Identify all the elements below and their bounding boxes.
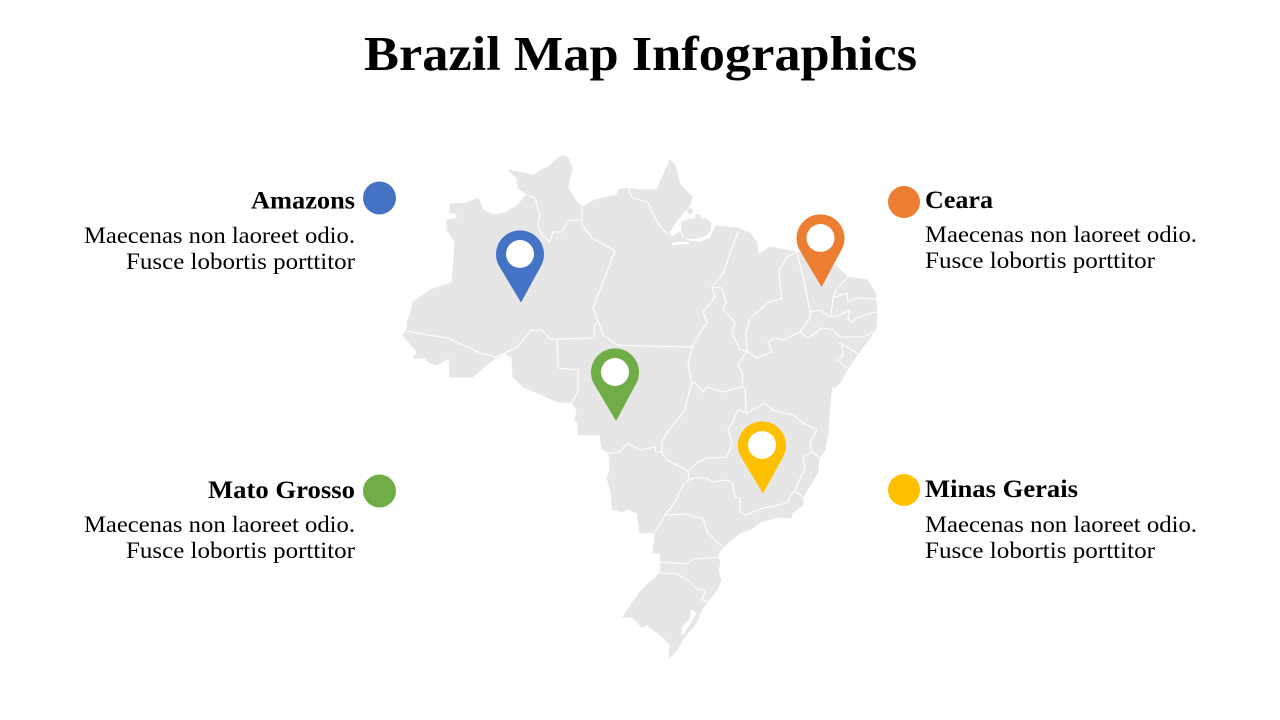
pin: Minas Gerais (yellow) [738,421,786,494]
map: Lagoa dos Patos [681,609,697,636]
text: Amazons description [84,223,355,274]
pin: Mato Grosso (green) [591,348,639,421]
icon: orange dot [888,186,920,218]
text: Mato Grosso description: Maecenas non laoreet odio. [84,512,355,537]
text: Ceara description: Maecenas non laoreet odio. [925,222,1197,247]
callout: Minas Gerais [888,474,1197,563]
map: state borders [407,188,877,601]
text: Mato Grosso description [84,512,355,563]
callout: Amazons [84,182,396,274]
text: Amazons description: Maecenas non laoreet odio. [84,223,355,248]
text: Minas Gerais description: Maecenas non laoreet odio. [925,512,1197,537]
heading: Mato Grosso: Mato Grosso [208,477,355,504]
text: Mato Grosso description: Fusce lobortis porttitor [126,538,355,563]
icon: green dot [363,474,396,508]
map: river mouth islets [687,208,701,220]
text: Amazons description: Fusce lobortis porttitor [126,249,355,274]
text: Minas Gerais description [925,512,1197,563]
text: Minas Gerais description: Fusce lobortis porttitor [925,538,1155,563]
heading: Ceara: Ceara [925,187,994,214]
map: Marajo island [681,218,711,239]
callout: Ceara [888,186,1197,273]
heading: Minas Gerais: Minas Gerais [925,476,1078,503]
text: Ceara description: Fusce lobortis porttitor [925,248,1155,273]
text: Ceara description [925,222,1197,273]
pin: Ceara (orange) [796,214,844,287]
icon: yellow dot [888,474,920,506]
map: country silhouette [403,155,877,658]
pin: Amazons (blue) [496,230,544,302]
map of Brazil [403,155,877,658]
heading: Amazons: Amazons [251,188,355,214]
title: Brazil Map Infographics [364,26,917,81]
icon: blue dot [363,182,396,214]
callout: Mato Grosso [84,474,396,563]
